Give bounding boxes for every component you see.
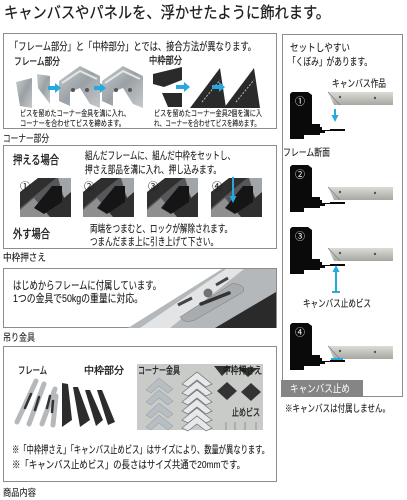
heading: recess [288, 42, 372, 68]
badge: canvas stop: キャンバス止め [290, 383, 350, 395]
photo: metal fitting [128, 269, 276, 328]
panel: canvas setting [281, 34, 402, 397]
notes: ※「中枠押さえ」「キャンバス止めビス」はサイズにより、数量が異なります。 [12, 443, 269, 456]
arrow: down [332, 109, 338, 122]
captions: frame steps [20, 108, 130, 128]
heading: removing: 外す場合 [13, 227, 50, 241]
panel: product contents [4, 346, 276, 482]
badge: canvas stop [281, 380, 363, 397]
text: attached description [13, 279, 161, 305]
label: canvas stop screw: キャンバス止めビス [303, 298, 371, 310]
arrows: frame steps [48, 83, 106, 93]
section label: corner: コーナー部分 [3, 133, 49, 145]
text: attached description: はじめからフレームに付属しています。 [13, 279, 161, 292]
captions: inner frame steps [154, 108, 262, 128]
title: キャンバスやパネルを、浮かせたように飾れます。 [4, 4, 330, 22]
text: removing instructions: 両端をつまむと、ロックが解除されます。 [90, 222, 232, 235]
captions: inner frame steps: ビスを留めたコーナー金具2個を溝に入 [154, 108, 262, 118]
label: inner frame part: 中枠部分 [149, 54, 182, 67]
text: removing instructions [90, 222, 232, 248]
photo: fittings [137, 364, 263, 431]
text: attached description: 1つの金具で50kgの重量に対応。 [13, 291, 143, 305]
step 1: ① [295, 96, 305, 108]
step 1 [290, 92, 393, 139]
notes: ※「キャンバス止めビス」の長さはサイズ共通で20mmです。 [12, 458, 245, 471]
photos: steps 1 to 4: ② [84, 181, 94, 193]
photo: inner frame pieces [62, 383, 115, 427]
label: frame section: フレーム断面 [283, 147, 330, 159]
step 2 [290, 165, 393, 212]
text: pressing instructions [85, 149, 235, 176]
photos: steps 1 to 4: ④ [212, 181, 222, 193]
captions: frame steps: ビスを留めたコーナー金具を溝に入れ、 [20, 108, 130, 118]
label: inner frame: 中枠部分 [84, 364, 124, 377]
step 4 [290, 323, 393, 370]
step 3: ③ [295, 231, 305, 243]
heading: recess: 「くぼみ」があります。 [288, 55, 372, 68]
text: pressing instructions: 組んだフレームに、組んだ中枠をセットし、 [85, 149, 235, 162]
photo: frame pieces [17, 381, 56, 425]
panel: inner frame press [4, 268, 276, 328]
photos: steps 1 to 4: ③ [148, 181, 158, 193]
photos: steps 1 to 4: ① [20, 181, 30, 193]
section label: contents: 商品内容 [3, 487, 36, 499]
heading: recess: セットしやすい [290, 42, 350, 54]
panel: corner [4, 146, 276, 248]
label: corner fitting: コーナー金具 [138, 364, 180, 377]
notes [12, 443, 269, 471]
captions: inner frame steps: れ、コーナーを合わせてビスを締めます。 [154, 118, 260, 128]
label: frame part: フレーム部分 [14, 56, 60, 68]
heading: pressing: 押える場合 [13, 153, 59, 167]
arrow: up [332, 265, 340, 293]
section label: hanging fitting: 吊り金具 [3, 331, 35, 344]
captions: frame steps: コーナーを合わせてビスを締めます。 [20, 118, 125, 128]
text: removing instructions: つまんだまま上に引き上げて下さい。 [90, 235, 218, 248]
panel: joining method [4, 34, 276, 128]
photos: steps 1 to 4 [20, 178, 262, 217]
label: frame: フレーム [18, 365, 47, 377]
label: stop screw: 止めビス [232, 407, 260, 419]
heading: joining difference: 「フレーム部分」と「中枠部分」とでは、接合方法が異なります。 [10, 39, 256, 53]
arrows: inner frame steps [176, 82, 225, 92]
label: canvas work: キャンバス作品 [332, 78, 386, 90]
step 4: ④ [295, 327, 305, 339]
arrow: press down [230, 177, 236, 203]
photos: frame corner steps [16, 66, 143, 108]
section label: inner frame press: 中枠押さえ [3, 251, 46, 264]
step 2: ② [295, 169, 305, 181]
photos: inner frame corner steps [153, 67, 260, 108]
step 3 [290, 227, 393, 293]
label: inner frame press: 中枠押さえ [223, 364, 262, 377]
text: pressing instructions: 押さえ部品を溝に入れ、押し込みます。 [85, 163, 221, 176]
